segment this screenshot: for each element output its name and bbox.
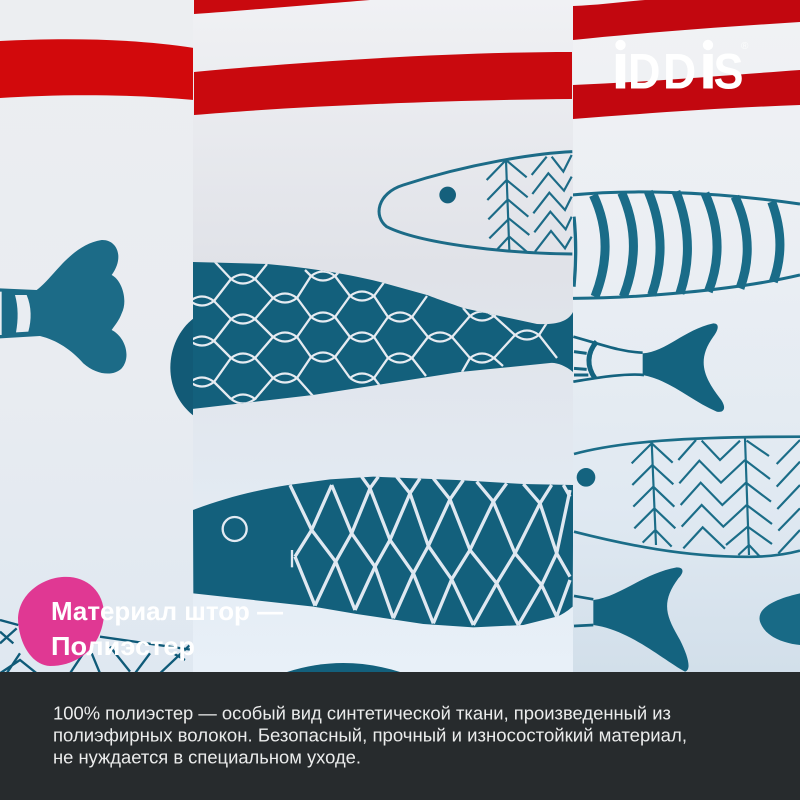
description text: 100% полиэстер — особый вид синтетической ткани, произведенный из [53, 704, 671, 724]
striped fish: right fold top [572, 192, 800, 298]
panel: dark description band [0, 672, 800, 800]
logo: iddis: I [699, 45, 717, 100]
logo: iddis: D [663, 45, 696, 100]
heading: Материал штор — [51, 596, 283, 626]
logo: iddis: I [612, 45, 630, 100]
description text [53, 704, 687, 768]
fish outline with chevrons: middle fold top [379, 152, 572, 254]
red stripe: left fold [0, 39, 194, 100]
fish tail: left fold [0, 240, 126, 374]
fish head: right fold lower [759, 593, 800, 645]
fish outline with chevrons: right fold middle [574, 437, 800, 557]
fish tail: right fold upper [573, 323, 724, 412]
lattice fish: middle fold lower [193, 477, 573, 627]
panel: left curtain fold [0, 0, 194, 673]
logo: iddis [612, 40, 749, 100]
fish tail: right fold lower [574, 567, 689, 672]
logo: iddis: D [628, 44, 660, 100]
description text: не нуждается в специальном уходе. [53, 748, 361, 768]
net-pattern fish: middle fold [190, 262, 573, 409]
heading [51, 596, 283, 661]
panel: right curtain fold [572, 0, 800, 672]
fish head: net fish nose on left fold [170, 318, 194, 416]
fish lattice: bottom-left pattern [0, 620, 193, 673]
pink blob behind heading [18, 577, 104, 666]
logo: iddis: ® [741, 41, 749, 52]
description text: полиэфирных волокон. Безопасный, прочный и износостойкий материал, [53, 726, 687, 746]
heading: Полиэстер [51, 631, 195, 661]
red stripes: middle fold [194, 0, 572, 115]
fish group: right fold lower [573, 323, 800, 672]
logo: iddis: S [714, 44, 744, 100]
panel: middle curtain fold [190, 0, 573, 672]
red stripes: right fold [573, 0, 800, 119]
fish back: bottom of middle fold [287, 663, 400, 672]
